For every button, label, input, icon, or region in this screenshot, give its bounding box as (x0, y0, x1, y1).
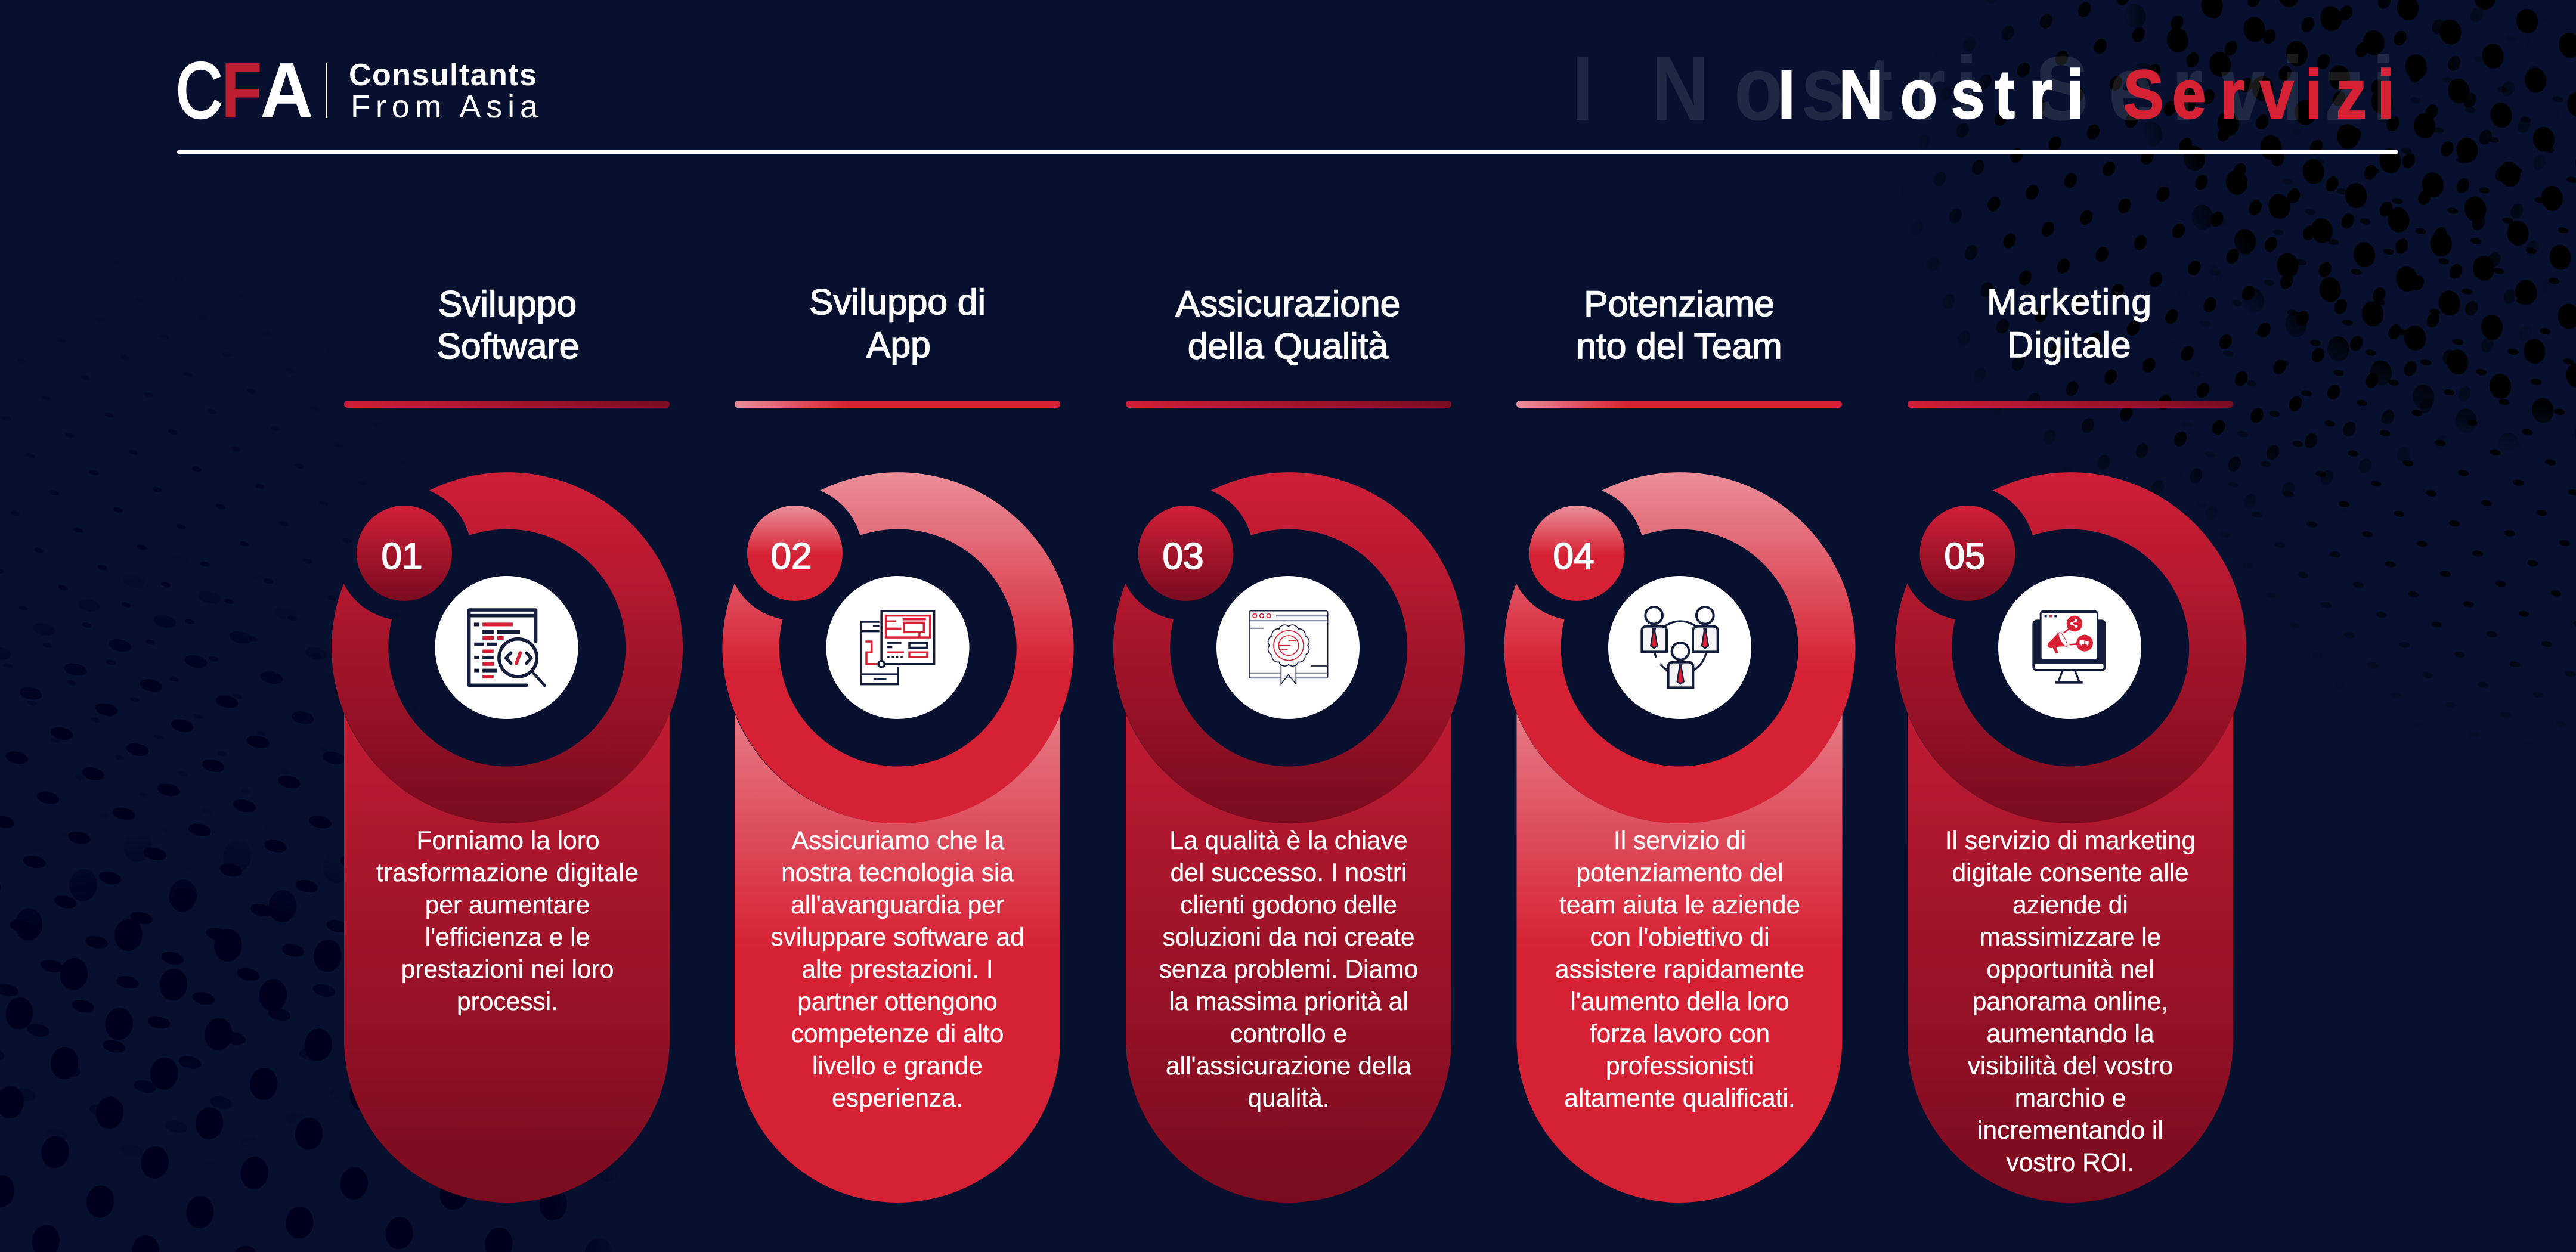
body text 2: Assicuriamo che la (792, 827, 1005, 855)
body text 5: aumentando la (1986, 1020, 2154, 1048)
body text 2: all'avanguardia per (791, 891, 1004, 919)
body text 1: prestazioni nei loro (401, 956, 614, 984)
body text 1: processi. (457, 988, 558, 1016)
heading: Sviluppo Software (437, 283, 579, 366)
body text 4: con l'obiettivo di (1590, 923, 1770, 952)
heading: Sviluppo di App: App (866, 324, 931, 365)
body text 1: l'efficienza e le (425, 923, 590, 952)
underline bar 2 (735, 401, 1060, 408)
column 2: Sviluppo di App (723, 281, 1074, 1203)
body text 3: qualità. (1247, 1084, 1330, 1112)
number badge 04: 04 (1553, 536, 1594, 577)
ghost title behind heading: INostriServizi (1571, 38, 2394, 140)
underline bar 1 (344, 401, 670, 408)
body text 1: trasformazione digitale (376, 859, 639, 887)
icon: team of three people (1608, 576, 1751, 719)
ring 2 (723, 472, 1074, 823)
number badge 02 (747, 506, 843, 601)
logo: Consultants From Asia: Consultants (349, 58, 537, 92)
body text 2: esperienza. (832, 1084, 963, 1112)
capsule panel 3 (1126, 714, 1451, 1203)
body text 5: panorama online, (1973, 988, 2168, 1016)
logo: Consultants From Asia: A (260, 47, 314, 135)
body text 3 (1159, 827, 1418, 1112)
heading: Potenziamento del Team: Potenziame (1584, 283, 1775, 324)
heading: Marketing Digitale (1987, 281, 2151, 365)
capsule panel 4 (1517, 714, 1843, 1203)
body text 4 (1555, 827, 1804, 1112)
body text 5: digitale consente alle (1952, 859, 2188, 887)
underline bar 5 (1908, 401, 2233, 408)
heading: Marketing Digitale: Digitale (2007, 324, 2131, 365)
body text 4: team aiuta le aziende (1559, 891, 1800, 919)
underline bar 3 (1126, 401, 1451, 408)
icon: quality certificate (1216, 576, 1360, 719)
body text 3: soluzioni da noi create (1163, 923, 1414, 952)
icon: mobile and web app (826, 576, 970, 719)
body text 3: all'assicurazione della (1166, 1052, 1411, 1080)
body text 2: sviluppare software ad (770, 923, 1024, 952)
heading: Sviluppo di App: Sviluppo di (809, 281, 986, 322)
body text 4: potenziamento del (1576, 859, 1784, 887)
logo: Consultants From Asia: C (176, 47, 222, 134)
body text 5: marchio e (2015, 1084, 2126, 1112)
body text 2: nostra tecnologia sia (781, 859, 1014, 887)
body text 3: controllo e (1230, 1020, 1347, 1048)
ring 5 (1895, 472, 2246, 823)
body text 3: La qualità è la chiave (1169, 827, 1408, 855)
logo: Consultants From Asia (176, 46, 538, 135)
number badge 05 (1920, 506, 2015, 601)
number badge 01 (357, 506, 452, 601)
body text 3: clienti godono delle (1180, 891, 1397, 919)
header rule (177, 150, 2398, 154)
body text 2 (770, 827, 1024, 1112)
logo: Consultants From Asia: From Asia (351, 89, 538, 125)
ring 4 (1504, 472, 1856, 823)
heading: Sviluppo Software: Sviluppo (438, 283, 577, 324)
heading: Potenziamento del Team (1576, 283, 1782, 366)
body text 1: per aumentare (425, 891, 590, 919)
body text 4: assistere rapidamente (1555, 956, 1804, 984)
icon: digital marketing monitor (1998, 576, 2141, 719)
body text 5: massimizzare le (1980, 923, 2161, 952)
body text 4: professionisti (1606, 1052, 1754, 1080)
body text 4: forza lavoro con (1590, 1020, 1770, 1048)
number badge 02: 02 (771, 536, 812, 577)
heading: Sviluppo di App (809, 281, 986, 365)
body text 2: partner ottengono (797, 988, 998, 1016)
capsule panel 2 (735, 714, 1060, 1203)
body text 3: del successo. I nostri (1171, 859, 1407, 887)
body text 2: alte prestazioni. I (801, 956, 993, 984)
number badge 03: 03 (1163, 536, 1203, 577)
underline bar 4 (1516, 401, 1842, 408)
capsule panel 1 (344, 714, 670, 1203)
body text 5: incrementando il (1977, 1117, 2163, 1145)
title: I Nostri Servizi: INostri (1778, 56, 2083, 132)
body text 5: visibilità del vostro (1968, 1052, 2173, 1080)
number badge 05: 05 (1945, 536, 1985, 577)
heading: Assicurazione della Qualità (1176, 283, 1400, 366)
column 4: Potenziamento del Team (1504, 283, 1856, 1203)
heading: Potenziamento del Team: nto del Team (1576, 326, 1782, 366)
logo: Consultants From Asia: F (221, 46, 262, 134)
number badge 01: 01 (382, 536, 422, 577)
body text 4: Il servizio di (1614, 827, 1746, 855)
title: I Nostri Servizi: Servizi (2123, 56, 2394, 132)
ring 1 (332, 472, 683, 823)
number badge 03 (1138, 506, 1233, 601)
number badge 04 (1529, 506, 1624, 601)
capsule panel 5 (1908, 714, 2233, 1203)
heading: Marketing Digitale: Marketing (1987, 281, 2151, 322)
body text 3: la massima priorità al (1169, 988, 1408, 1016)
body text 3: senza problemi. Diamo (1159, 956, 1418, 984)
column 3: Assicurazione della Qualità (1113, 283, 1465, 1203)
body text 5: vostro ROI. (2007, 1149, 2134, 1177)
heading: Sviluppo Software: Software (437, 326, 579, 366)
icon: code review magnifier (435, 576, 578, 719)
body text 1 (376, 827, 639, 1016)
body text 2: livello e grande (812, 1052, 983, 1080)
body text 5: Il servizio di marketing (1945, 827, 2196, 855)
heading: Assicurazione della Qualità: Assicurazione (1176, 283, 1400, 324)
body text 5: aziende di (2012, 891, 2128, 919)
body text 5 (1945, 827, 2196, 1177)
body text 2: competenze di alto (791, 1020, 1004, 1048)
body text 5: opportunità nel (1986, 956, 2154, 984)
column 5: Marketing Digitale (1895, 281, 2246, 1203)
body text 1: Forniamo la loro (416, 827, 600, 855)
heading: Assicurazione della Qualità: della Qualità (1188, 326, 1389, 366)
body text 4: altamente qualificati. (1564, 1084, 1795, 1112)
body text 4: l'aumento della loro (1570, 988, 1789, 1016)
column 1: Sviluppo Software (332, 283, 683, 1203)
ring 3 (1113, 472, 1465, 823)
